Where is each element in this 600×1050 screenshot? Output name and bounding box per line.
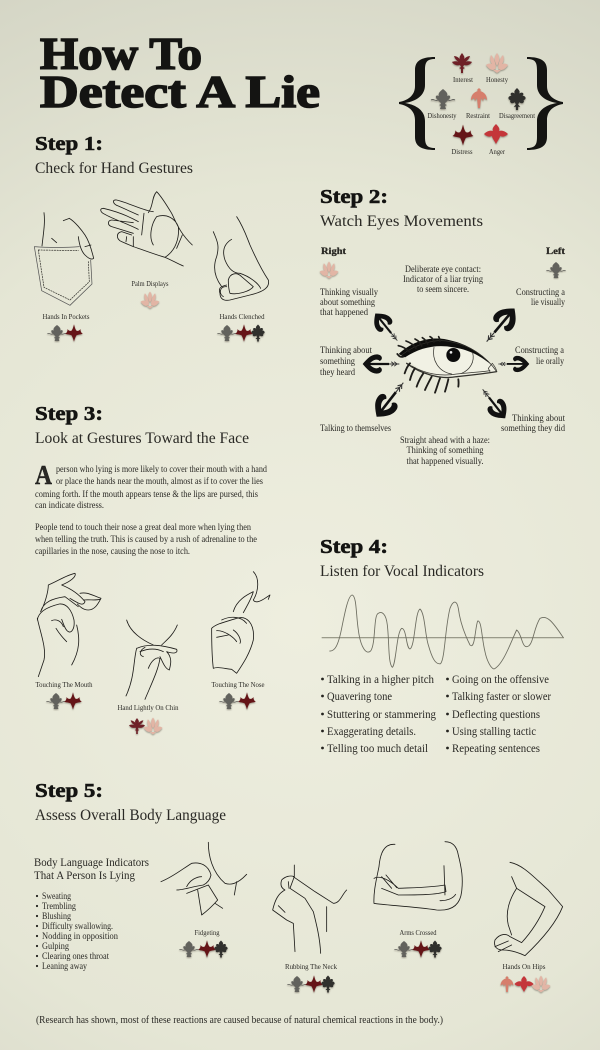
list: body language indicators bbox=[36, 892, 118, 972]
label: arms crossed: Arms Crossed bbox=[400, 929, 437, 937]
icon: disagreement bbox=[508, 88, 526, 110]
list: vocal indicators left bbox=[321, 674, 436, 755]
text: thinking about something done bbox=[501, 413, 565, 433]
panel: step 3 gestures toward the face bbox=[35, 403, 270, 734]
list: body language indicators: Trembling bbox=[42, 902, 76, 912]
list: vocal indicators right: Deflecting questions bbox=[452, 709, 540, 721]
list: vocal indicators left: Stuttering or stammering bbox=[327, 709, 436, 721]
chart: voice waveform bbox=[322, 595, 564, 669]
text: thinking visually: that happened bbox=[320, 307, 368, 317]
legend labels: Distress bbox=[452, 148, 473, 156]
list: body language indicators: Difficulty swallowing. bbox=[42, 921, 113, 932]
icons: palm displays bbox=[141, 292, 159, 308]
illustration: touching the mouth bbox=[37, 573, 101, 677]
legend labels: Dishonesty bbox=[428, 112, 457, 120]
paragraph: touching the nose bbox=[35, 523, 257, 557]
left brace bbox=[399, 57, 435, 150]
list: vocal indicators left: Telling too much detail bbox=[327, 743, 428, 755]
arrow: down-left bbox=[368, 376, 412, 424]
icons: touching the nose bbox=[219, 692, 256, 710]
heading: step 1: Step 1: bbox=[35, 133, 103, 155]
text: deliberate eye contact: Deliberate eye contact: bbox=[405, 264, 481, 274]
label: palm displays: Palm Displays bbox=[132, 280, 169, 288]
illustration: eye bbox=[397, 337, 497, 393]
text: thinking visually: about something bbox=[320, 297, 375, 307]
legend labels: Restraint bbox=[466, 112, 490, 120]
arrow: down-right bbox=[475, 383, 513, 424]
text: thinking about something heard: Thinking about bbox=[320, 345, 372, 355]
icon: dishonesty bbox=[546, 262, 566, 278]
subheading: step 5: Assess Overall Body Language bbox=[35, 807, 226, 824]
list: vocal indicators right: Repeating sentences bbox=[452, 743, 540, 755]
text: constructing orally: Constructing a bbox=[515, 345, 564, 355]
text: straight ahead: that happened visually. bbox=[406, 456, 484, 466]
icons: hands on hips bbox=[501, 976, 550, 992]
list: body language indicators: Blushing bbox=[42, 912, 71, 922]
text: thinking visually bbox=[320, 287, 378, 317]
label: rubbing the neck: Rubbing The Neck bbox=[285, 963, 337, 971]
footer note: (Research has shown, most of these reactions are caused because of natural chemical reactions in the body.) bbox=[36, 1015, 443, 1026]
title: Detect A Lie bbox=[40, 67, 320, 117]
text: thinking about something heard bbox=[320, 345, 372, 377]
list: body language indicators: Sweating bbox=[42, 892, 71, 902]
text: thinking about something done: Thinking about bbox=[512, 413, 565, 423]
icons: hands in pockets bbox=[47, 324, 83, 342]
list: body language indicators: Clearing ones throat bbox=[42, 952, 109, 962]
list: vocal indicators left: Quavering tone bbox=[327, 691, 392, 703]
label: fidgeting: Fidgeting bbox=[194, 929, 220, 937]
illustration: arms crossed bbox=[374, 842, 462, 910]
text: constructing orally bbox=[515, 345, 564, 366]
heading: step 5: Step 5: bbox=[35, 780, 103, 802]
icon: honesty bbox=[320, 262, 338, 278]
legend labels: Disagreement bbox=[499, 112, 535, 120]
text: constructing orally: lie orally bbox=[536, 356, 564, 366]
text: constructing visually: lie visually bbox=[531, 297, 565, 307]
list: body language indicators: Gulping bbox=[42, 942, 69, 952]
legend labels: Honesty bbox=[486, 76, 508, 84]
text: thinking about something heard: something bbox=[320, 356, 355, 366]
label: touching the mouth: Touching The Mouth bbox=[36, 681, 93, 689]
list: body language indicators: Leaning away bbox=[42, 962, 87, 972]
subheading: step 4: Listen for Vocal Indicators bbox=[320, 563, 484, 580]
arrow: up-left bbox=[368, 308, 404, 346]
text: constructing visually: Constructing a bbox=[516, 287, 565, 297]
paragraph: touching the nose: People tend to touch their nose a great deal more when lying then bbox=[35, 523, 251, 533]
paragraph: touching the nose: when telling the truth. This is caused by a rush of adrenaline to the bbox=[35, 534, 257, 545]
list: body language indicators: Nodding in opposition bbox=[42, 932, 118, 942]
label: hands in pockets: Hands In Pockets bbox=[42, 313, 90, 321]
paragraph: covering the mouth: person who lying is more likely to cover their mouth with a hand bbox=[56, 465, 267, 475]
panel: step 2 eye movements bbox=[320, 186, 566, 466]
icon: distress bbox=[453, 125, 473, 145]
icons: rubbing the neck bbox=[287, 975, 335, 993]
text: indicators heading: Body Language Indicators bbox=[34, 857, 149, 869]
label: hands on hips: Hands On Hips bbox=[502, 963, 546, 971]
label: right: Right bbox=[321, 247, 347, 257]
illustration: hands on hips bbox=[495, 862, 563, 956]
text: straight ahead bbox=[400, 435, 490, 466]
panel: step 1 hand gestures bbox=[34, 133, 269, 342]
text: deliberate eye contact bbox=[403, 264, 483, 294]
panel: step 5 body language bbox=[34, 780, 563, 993]
legend labels: Anger bbox=[489, 148, 506, 156]
list: vocal indicators right: Talking faster or slower bbox=[452, 691, 551, 703]
text: thinking visually: Thinking visually bbox=[320, 287, 378, 297]
icon: restraint bbox=[471, 88, 487, 108]
icon: anger bbox=[484, 124, 508, 144]
illustration: hands clenched bbox=[213, 217, 269, 300]
text: indicators heading: That A Person Is Lying bbox=[34, 870, 135, 882]
paragraph: covering the mouth: coming forth. If the mouth appears tense & the lips are pursed, this bbox=[35, 489, 258, 500]
text: thinking about something done: something they did bbox=[501, 423, 565, 433]
subheading: step 3: Look at Gestures Toward the Face bbox=[35, 430, 249, 447]
panel: step 4 vocal indicators bbox=[320, 536, 564, 755]
title bbox=[40, 29, 320, 117]
text: constructing visually bbox=[516, 287, 565, 307]
text: thinking about something heard: they heard bbox=[320, 367, 355, 377]
legend: emotion key bbox=[399, 53, 563, 156]
icons: fidgeting bbox=[179, 940, 228, 958]
text: straight ahead: Thinking of something bbox=[406, 445, 484, 455]
icon: interest bbox=[452, 53, 472, 73]
title: How To bbox=[40, 29, 202, 79]
heading: step 2: Step 2: bbox=[320, 186, 388, 208]
label: touching the nose: Touching The Nose bbox=[212, 681, 264, 689]
illustration: hand lightly on chin bbox=[126, 620, 177, 699]
text: deliberate eye contact: Indicator of a liar trying bbox=[403, 274, 483, 284]
arrow: right bbox=[498, 356, 529, 372]
arrow: left bbox=[363, 354, 399, 374]
heading: step 3: Step 3: bbox=[35, 403, 103, 425]
text: talking to themselves: Talking to themselves bbox=[320, 423, 391, 433]
illustration: palm display bbox=[101, 192, 192, 266]
text: deliberate eye contact: to seem sincere. bbox=[417, 284, 469, 294]
icons: arms crossed bbox=[394, 940, 442, 958]
icon: dishonesty bbox=[431, 89, 455, 109]
illustration: hands in pockets bbox=[34, 213, 94, 305]
text: indicators heading bbox=[34, 857, 149, 882]
arrow: up-right bbox=[478, 301, 523, 349]
label: left: Left bbox=[546, 247, 566, 257]
subheading: step 2: Watch Eyes Movements bbox=[320, 213, 483, 230]
text: straight ahead: Straight ahead with a haze: bbox=[400, 435, 490, 445]
icons: hand lightly on chin bbox=[129, 718, 162, 734]
heading: step 4: Step 4: bbox=[320, 536, 388, 558]
label: hand lightly on chin: Hand Lightly On Chin bbox=[118, 704, 179, 712]
list: vocal indicators left: Exaggerating details. bbox=[327, 726, 416, 738]
paragraph: covering the mouth: or place the hands near the mouth, almost as if to cover the lies bbox=[56, 476, 263, 487]
legend labels bbox=[428, 76, 535, 156]
right brace bbox=[527, 57, 563, 150]
drop cap: A bbox=[35, 460, 52, 490]
subheading: step 1: Check for Hand Gestures bbox=[35, 160, 193, 177]
illustration: rubbing the neck bbox=[273, 865, 347, 953]
paragraph: covering the mouth: can indicate distress. bbox=[35, 501, 104, 511]
list: vocal indicators right: Going on the offensive bbox=[452, 674, 549, 686]
icons: hands clenched bbox=[217, 324, 265, 342]
list: vocal indicators right bbox=[446, 674, 551, 755]
icon: honesty bbox=[486, 53, 508, 73]
label: hands clenched: Hands Clenched bbox=[220, 313, 265, 321]
paragraph: covering the mouth bbox=[35, 465, 267, 511]
illustration: fidgeting bbox=[161, 842, 247, 915]
icons: touching the mouth bbox=[46, 692, 82, 710]
list: vocal indicators right: Using stalling tactic bbox=[452, 726, 536, 738]
illustration: touching the nose bbox=[212, 572, 270, 673]
list: vocal indicators left: Talking in a higher pitch bbox=[327, 674, 434, 686]
paragraph: touching the nose: capillaries in the nose, causing the nose to itch. bbox=[35, 547, 190, 557]
legend labels: Interest bbox=[453, 76, 473, 84]
